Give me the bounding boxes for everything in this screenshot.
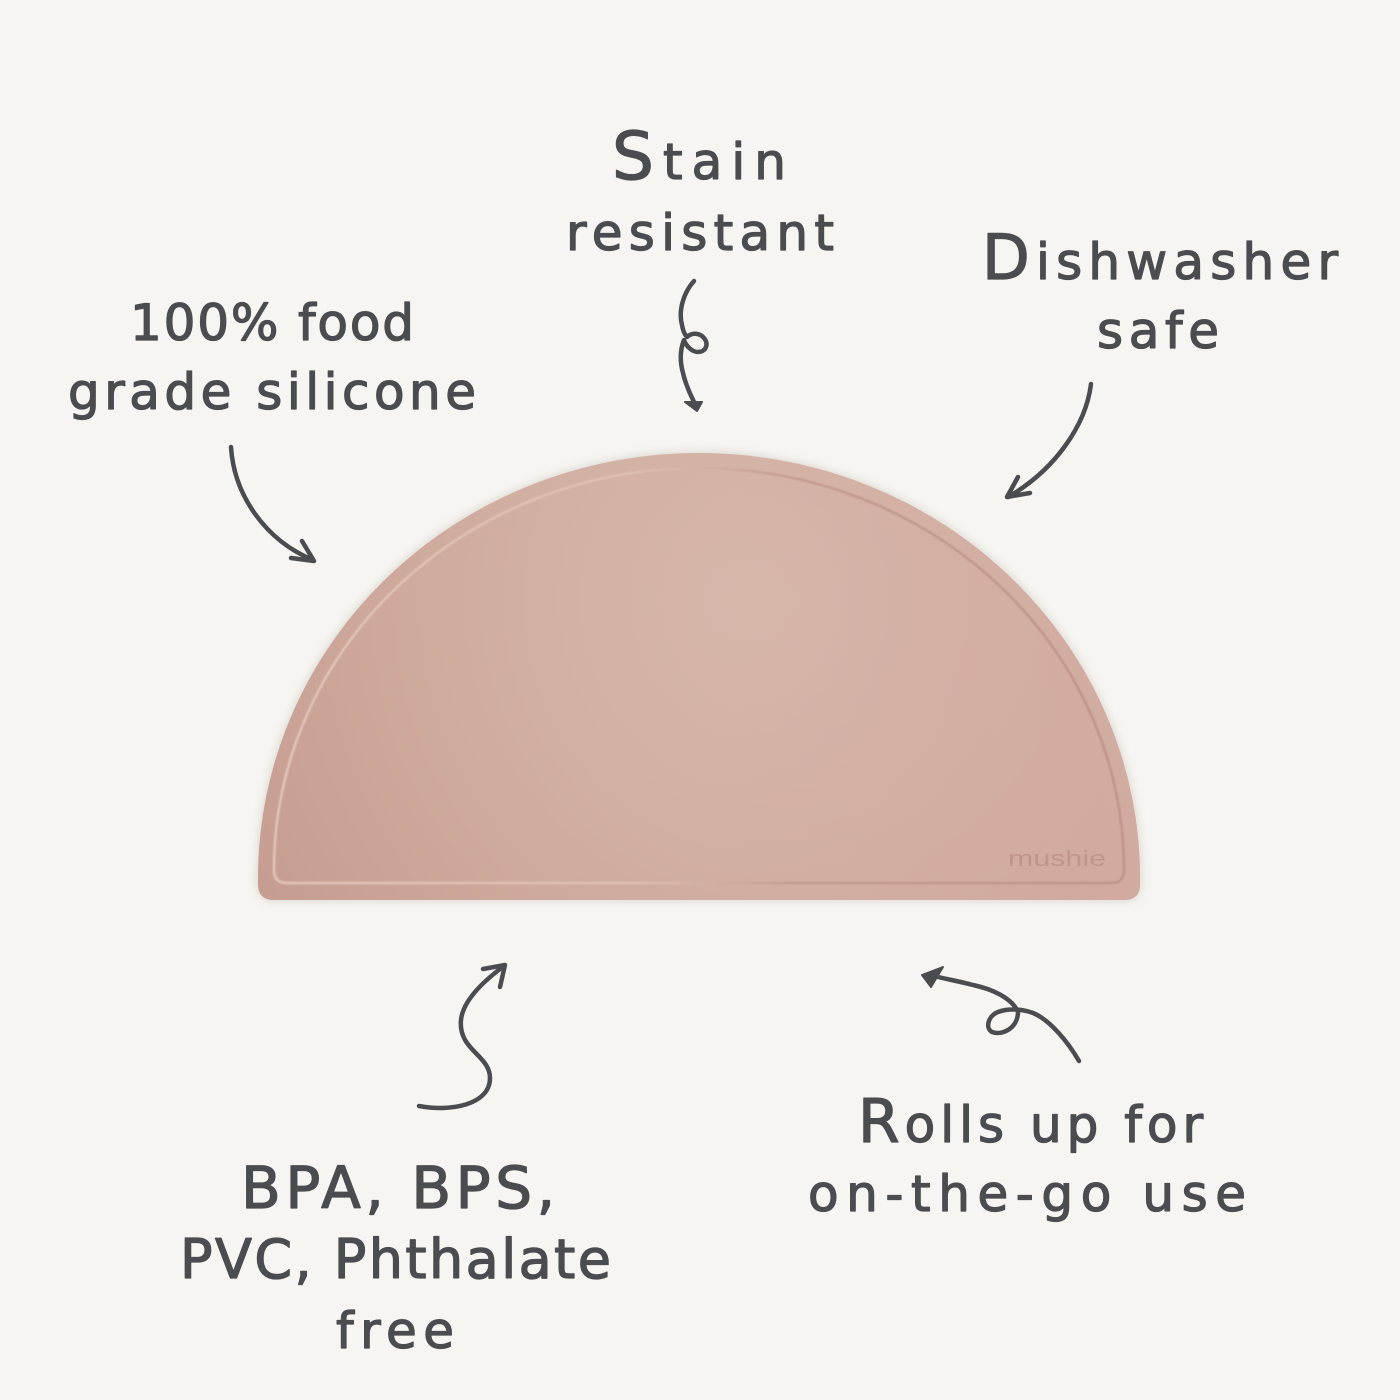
- arrow: rolls up: [922, 967, 1079, 1061]
- label: dishwasher safe: Dishwasher: [982, 221, 1338, 294]
- label: rolls up: Rolls up for: [858, 1087, 1203, 1157]
- arrow: stain resistant: [681, 281, 706, 411]
- label: BPA free: PVC, Phthalate: [180, 1228, 611, 1291]
- arrow: food grade silicone: [231, 447, 314, 561]
- label: stain resistant: [566, 118, 834, 262]
- label: food grade silicone: grade silicone: [68, 363, 476, 421]
- label: rolls up: on-the-go use: [808, 1165, 1246, 1223]
- label: dishwasher safe: safe: [1097, 302, 1219, 360]
- arrow: dishwasher safe: [1007, 384, 1091, 497]
- label: BPA free: [180, 1154, 611, 1360]
- label: BPA free: free: [336, 1302, 454, 1360]
- label: stain resistant: Stain: [612, 118, 786, 195]
- label: dishwasher safe: [982, 221, 1338, 360]
- label: BPA free: BPA, BPS,: [241, 1154, 555, 1222]
- label: rolls up: [808, 1087, 1246, 1223]
- label: food grade silicone: 100% food: [130, 294, 414, 352]
- brand mark: mushie: [1008, 846, 1106, 871]
- label: food grade silicone: [68, 294, 476, 421]
- arrow: BPA free: [419, 965, 505, 1108]
- placemat: [258, 453, 1140, 900]
- label: stain resistant: resistant: [566, 204, 834, 262]
